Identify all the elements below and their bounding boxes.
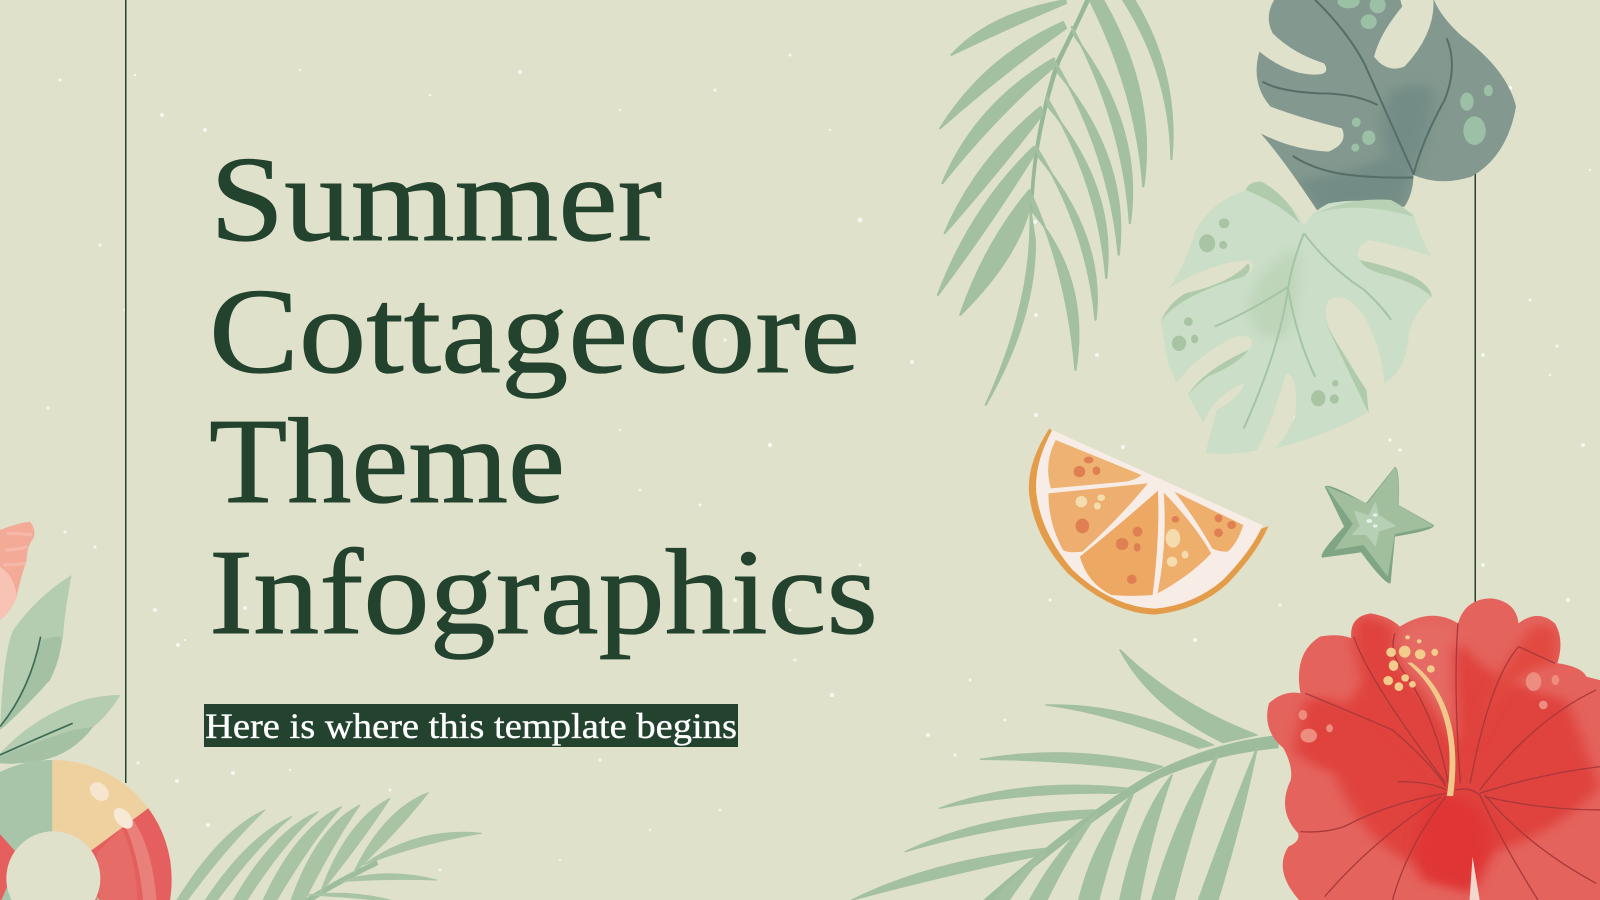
illustration: seashell: [0, 522, 34, 620]
illustration: swim ring: [0, 760, 172, 900]
illustration: top palm frond: [938, 0, 1173, 405]
title line: Infographics: Infographics: [209, 525, 878, 660]
right vertical line: [1474, 170, 1476, 602]
title line: Cottagecore: Cottagecore: [209, 264, 860, 399]
illustration: bottom palm frond: [852, 650, 1279, 900]
illustration: starfish: [1322, 467, 1434, 583]
title line: Theme: Theme: [209, 394, 565, 529]
title: [209, 132, 878, 660]
illustration: dark monstera leaf: [1257, 0, 1516, 211]
illustration: left leaves: [0, 575, 121, 764]
subtitle banner: Here is where this template begins: [205, 706, 737, 746]
illustration: red hibiscus flower: [1267, 598, 1600, 900]
illustration: orange slice: [1029, 428, 1268, 615]
illustration: bottom-left palm frond: [175, 793, 482, 900]
title line: Summer: Summer: [210, 132, 662, 267]
illustration: light monstera leaf: [1161, 182, 1432, 454]
left vertical line: [125, 0, 126, 783]
